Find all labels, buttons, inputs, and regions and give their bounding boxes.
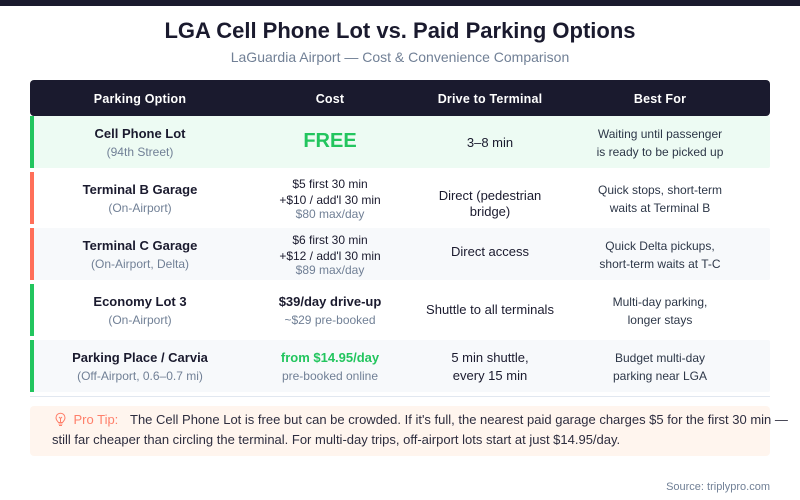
row: Economy Lot 3: ~$29 pre-booked: [284, 313, 376, 327]
icon: light bulb: [56, 413, 65, 426]
row: Terminal B Garage: Direct (pedestrian: [439, 188, 541, 203]
row: Cell Phone Lot: (94th Street): [107, 145, 173, 159]
pro tip body: [52, 412, 788, 447]
row: Parking Place / Carvia: Parking Place / Carvia: [72, 350, 209, 365]
row: Terminal C Garage: Quick Delta pickups,: [605, 239, 715, 253]
row: Terminal B Garage: +$10 / add'l 30 min: [279, 193, 381, 207]
table header: Cost: [316, 92, 345, 106]
row: Cell Phone Lot: 3–8 min: [467, 135, 513, 150]
row: Parking Place / Carvia: Budget multi-day: [615, 351, 705, 365]
row: Cell Phone Lot: [30, 116, 770, 168]
row: Terminal B Garage: $5 first 30 min: [292, 177, 368, 191]
row: Parking Place / Carvia: from $14.95/day: [281, 350, 380, 365]
row: Terminal C Garage: $6 first 30 min: [292, 233, 368, 247]
row: Economy Lot 3: Economy Lot 3: [93, 294, 187, 309]
row: Parking Place / Carvia: 5 min shuttle,: [451, 350, 529, 365]
row: Economy Lot 3: [30, 284, 707, 336]
row: Parking Place / Carvia: parking near LGA: [613, 369, 707, 383]
row: Terminal B Garage: waits at Terminal B: [609, 201, 710, 215]
pro tip body: still far cheaper than circling the terminal. For multi-day trips, off-airport lots start at just $14.95/day.: [52, 432, 620, 447]
source: Source: triplypro.com: [666, 481, 770, 493]
row: Parking Place / Carvia: [30, 340, 770, 392]
row: Economy Lot 3: $39/day drive-up: [279, 294, 381, 309]
row: Cell Phone Lot: Cell Phone Lot: [94, 126, 186, 141]
row: Terminal B Garage: (On-Airport): [108, 201, 172, 215]
row: Economy Lot 3: Shuttle to all terminals: [426, 302, 554, 317]
row: Economy Lot 3: (On-Airport): [108, 313, 172, 327]
row: Terminal C Garage: (On-Airport, Delta): [91, 257, 189, 271]
row: Cell Phone Lot: Waiting until passenger: [598, 127, 722, 141]
divider: [30, 396, 770, 397]
row: Terminal B Garage: Quick stops, short-term: [598, 183, 722, 197]
row: Terminal C Garage: +$12 / add'l 30 min: [279, 249, 381, 263]
row: Cell Phone Lot: is ready to be picked up: [597, 145, 724, 159]
table header: [30, 80, 770, 116]
table header: Parking Option: [94, 92, 186, 106]
table header: Drive to Terminal: [438, 92, 542, 106]
row: Terminal C Garage: Direct access: [451, 244, 530, 259]
subtitle: LaGuardia Airport — Cost & Convenience Comparison: [231, 49, 569, 65]
row: Economy Lot 3: Multi-day parking,: [613, 295, 707, 309]
row: Parking Place / Carvia: (Off-Airport, 0.6–0.7 mi): [77, 369, 203, 383]
pro tip label: Pro Tip:: [74, 412, 118, 427]
table header: Best For: [634, 92, 686, 106]
row: Economy Lot 3: longer stays: [628, 313, 692, 327]
row: Parking Place / Carvia: pre-booked online: [282, 369, 378, 383]
pro tip body: The Cell Phone Lot is free but can be crowded. If it's full, the nearest paid garage charges $5 for the first 30 min —: [130, 412, 788, 427]
row: Terminal B Garage: bridge): [470, 204, 510, 219]
row: Terminal B Garage: Terminal B Garage: [83, 182, 197, 197]
title: LGA Cell Phone Lot vs. Paid Parking Options: [164, 18, 636, 43]
row: Terminal B Garage: $80 max/day: [296, 207, 364, 221]
row: Cell Phone Lot: FREE: [303, 130, 357, 152]
row: Terminal B Garage: [30, 172, 722, 224]
top bar: [0, 0, 800, 6]
row: Parking Place / Carvia: every 15 min: [453, 368, 527, 383]
pro tip callout: [30, 406, 788, 456]
row: Terminal C Garage: [30, 228, 770, 280]
row: Terminal C Garage: $89 max/day: [296, 263, 364, 277]
row: Terminal C Garage: Terminal C Garage: [83, 238, 197, 253]
row: Terminal C Garage: short-term waits at T-C: [599, 257, 721, 271]
